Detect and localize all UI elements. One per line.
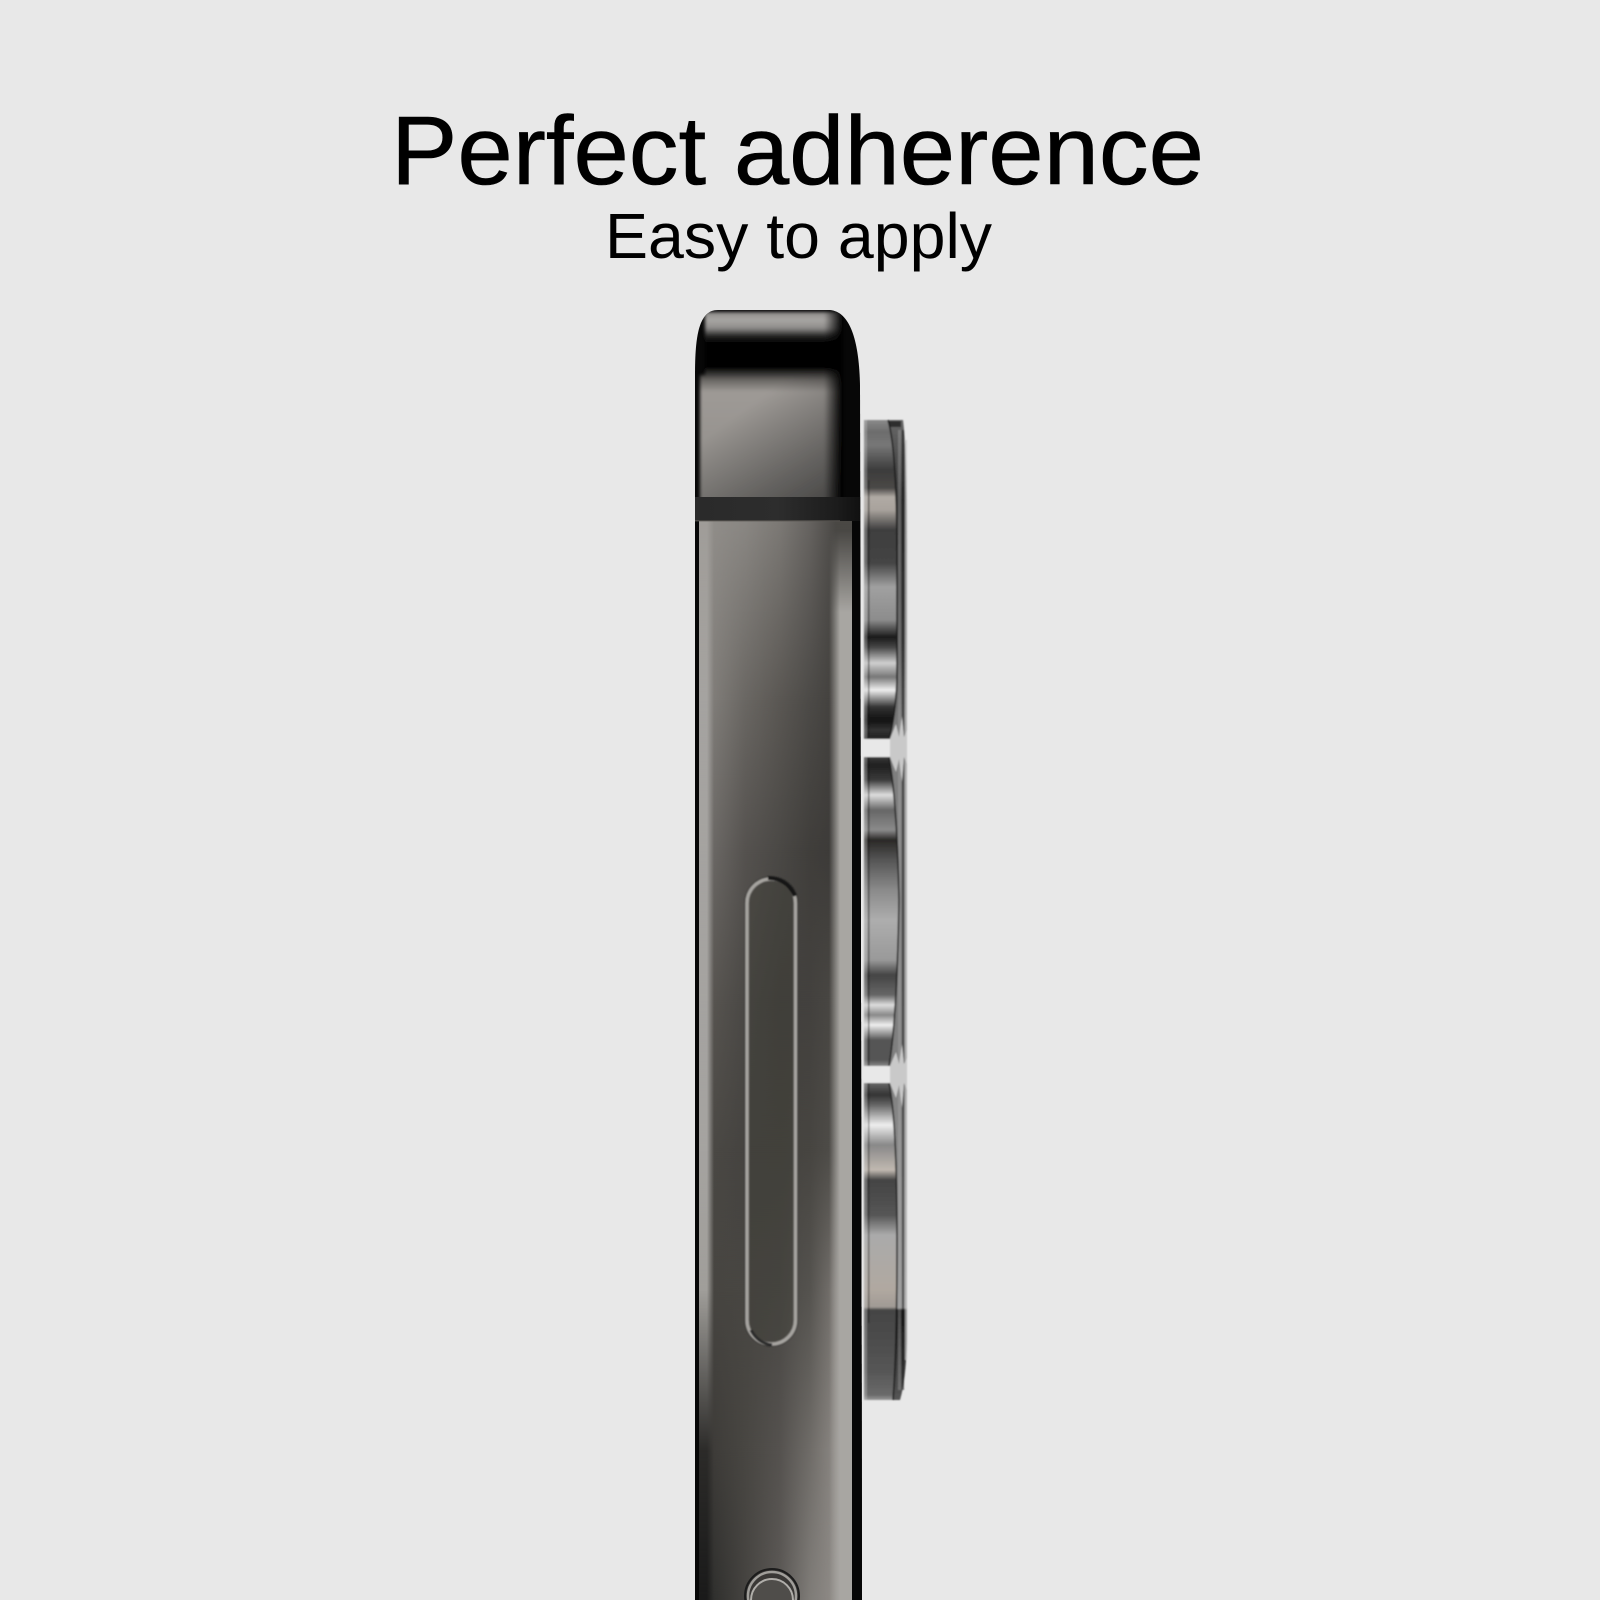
subtitle: Easy to apply — [605, 200, 992, 272]
lens ring middle — [864, 757, 899, 1066]
gaps between lenses — [864, 739, 890, 757]
main side panel — [699, 521, 852, 1600]
infographic canvas — [398, 113, 1200, 1600]
phone body — [695, 310, 862, 1600]
camera lens protector assembly — [864, 420, 907, 1400]
power port button — [745, 1569, 799, 1600]
lens ring bottom — [864, 1083, 897, 1400]
lens ring top — [864, 420, 897, 739]
volume button — [745, 877, 798, 1346]
lens reflection star bottom — [890, 1044, 907, 1108]
lens outer rim — [888, 420, 907, 1400]
lens reflection star top — [890, 716, 907, 782]
right highlight strip — [829, 521, 852, 1600]
top frame section — [700, 312, 843, 501]
black right edge — [860, 521, 862, 1600]
dark antenna band — [695, 497, 861, 522]
title: Perfect adherence — [391, 96, 1204, 205]
